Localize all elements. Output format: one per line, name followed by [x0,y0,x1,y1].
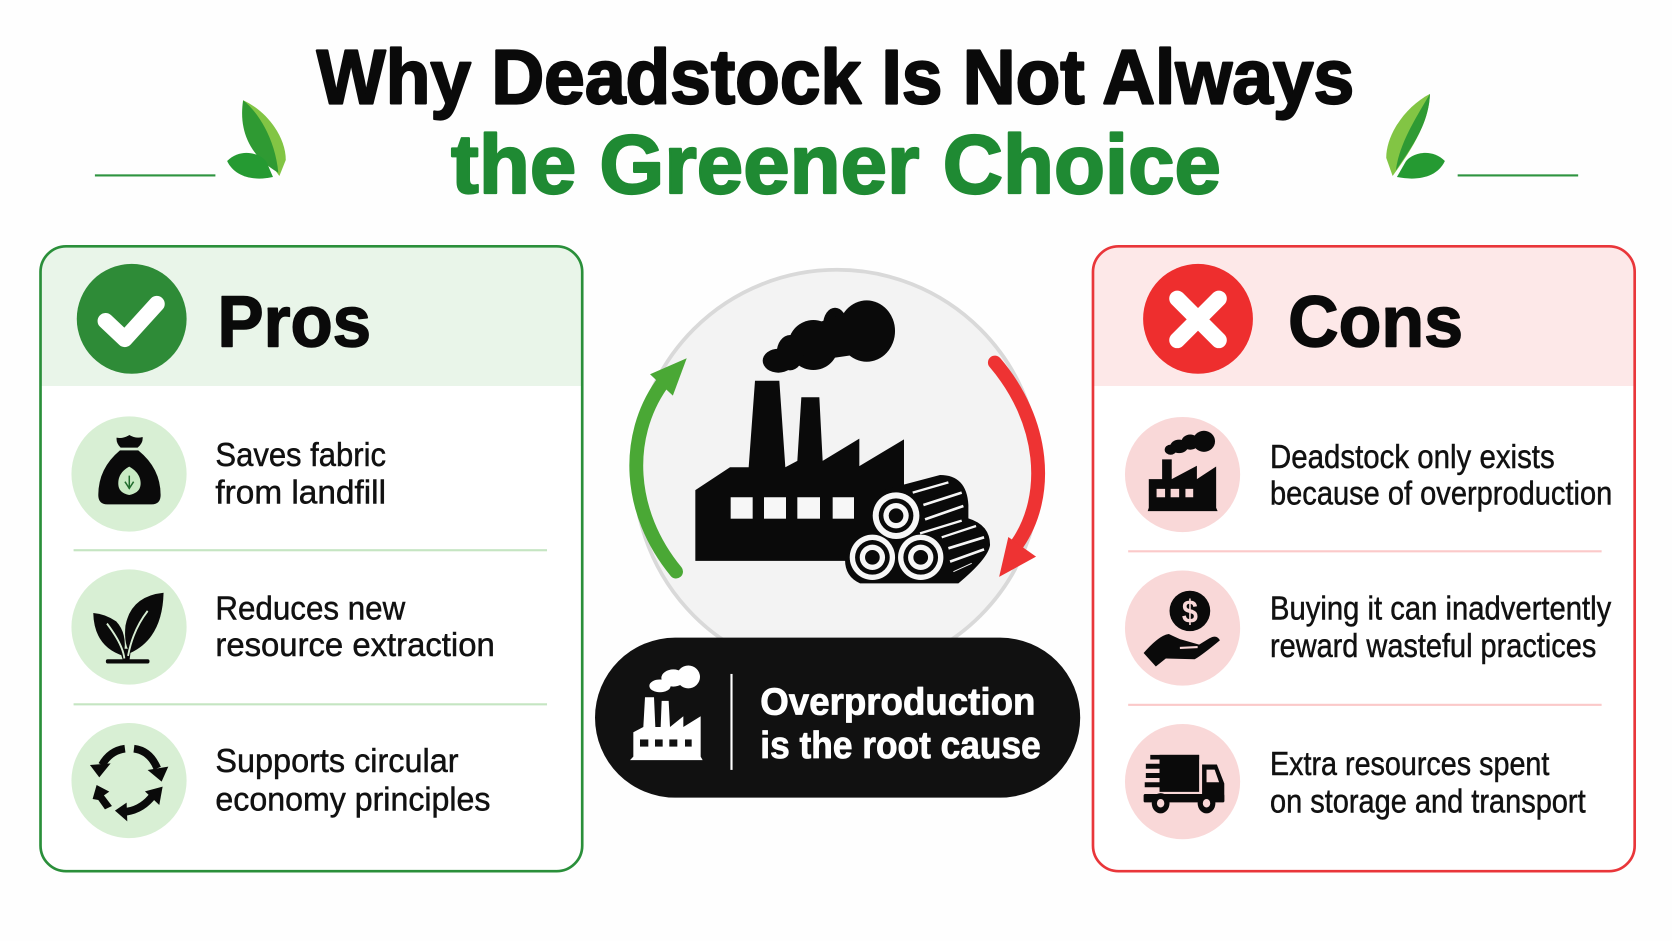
callout text: Overproduction [760,680,1035,723]
pros item 1 text [215,437,386,511]
cons item 1 text [1270,439,1612,512]
pros item 1 text: from landfill [215,474,386,511]
cons item 3 text: Extra resources spent [1270,746,1549,783]
left leaf decoration [95,100,286,179]
title [317,35,1354,211]
icon: fabric bag [71,416,187,532]
pros item 3 text [215,743,491,818]
cons cross badge [1143,264,1253,374]
log pile [845,475,990,583]
callout text [760,680,1041,767]
callout text: is the root cause [760,724,1041,767]
pros item 2 text: resource extraction [215,627,495,664]
cons item 2 text: Buying it can inadvertently [1270,591,1612,628]
icon: white factory [630,666,703,760]
pros item 2 text [215,591,495,664]
cons item 3 text: on storage and transport [1270,784,1586,821]
pros heading: Pros [218,282,371,363]
icon: factory with logs [695,300,990,583]
green arrow [636,358,687,572]
callout: root cause pill [595,638,1080,798]
panel: pros [41,246,582,871]
icon: money in hand: $ [1182,593,1198,630]
icon: plant [71,569,187,685]
pros item 1 text: Saves fabric [215,437,386,474]
pros item 2 text: Reduces new [215,591,405,628]
title: the Greener Choice [451,118,1221,211]
smoke [763,300,895,373]
factory building [695,381,904,561]
icon: delivery truck [1125,724,1240,839]
pros item 3 text: Supports circular [215,743,459,780]
title: Why Deadstock Is Not Always [317,35,1354,120]
red arrow [995,363,1038,577]
right leaf decoration [1386,94,1578,179]
cons heading: Cons [1288,282,1463,363]
icon: circular arrows [71,723,187,838]
cons item 2 text: reward wasteful practices [1270,628,1596,665]
cons item 1 text: Deadstock only exists [1270,439,1555,476]
pros item 3 text: economy principles [215,781,491,818]
icon: money in hand [1125,570,1240,686]
pros check badge [77,264,187,374]
panel: cons [1093,246,1635,871]
icon: factory [1125,417,1240,532]
cons item 2 text [1270,591,1612,665]
cons item 1 text: because of overproduction [1270,475,1612,512]
central circle [634,270,1040,675]
cons item 3 text [1270,746,1586,821]
